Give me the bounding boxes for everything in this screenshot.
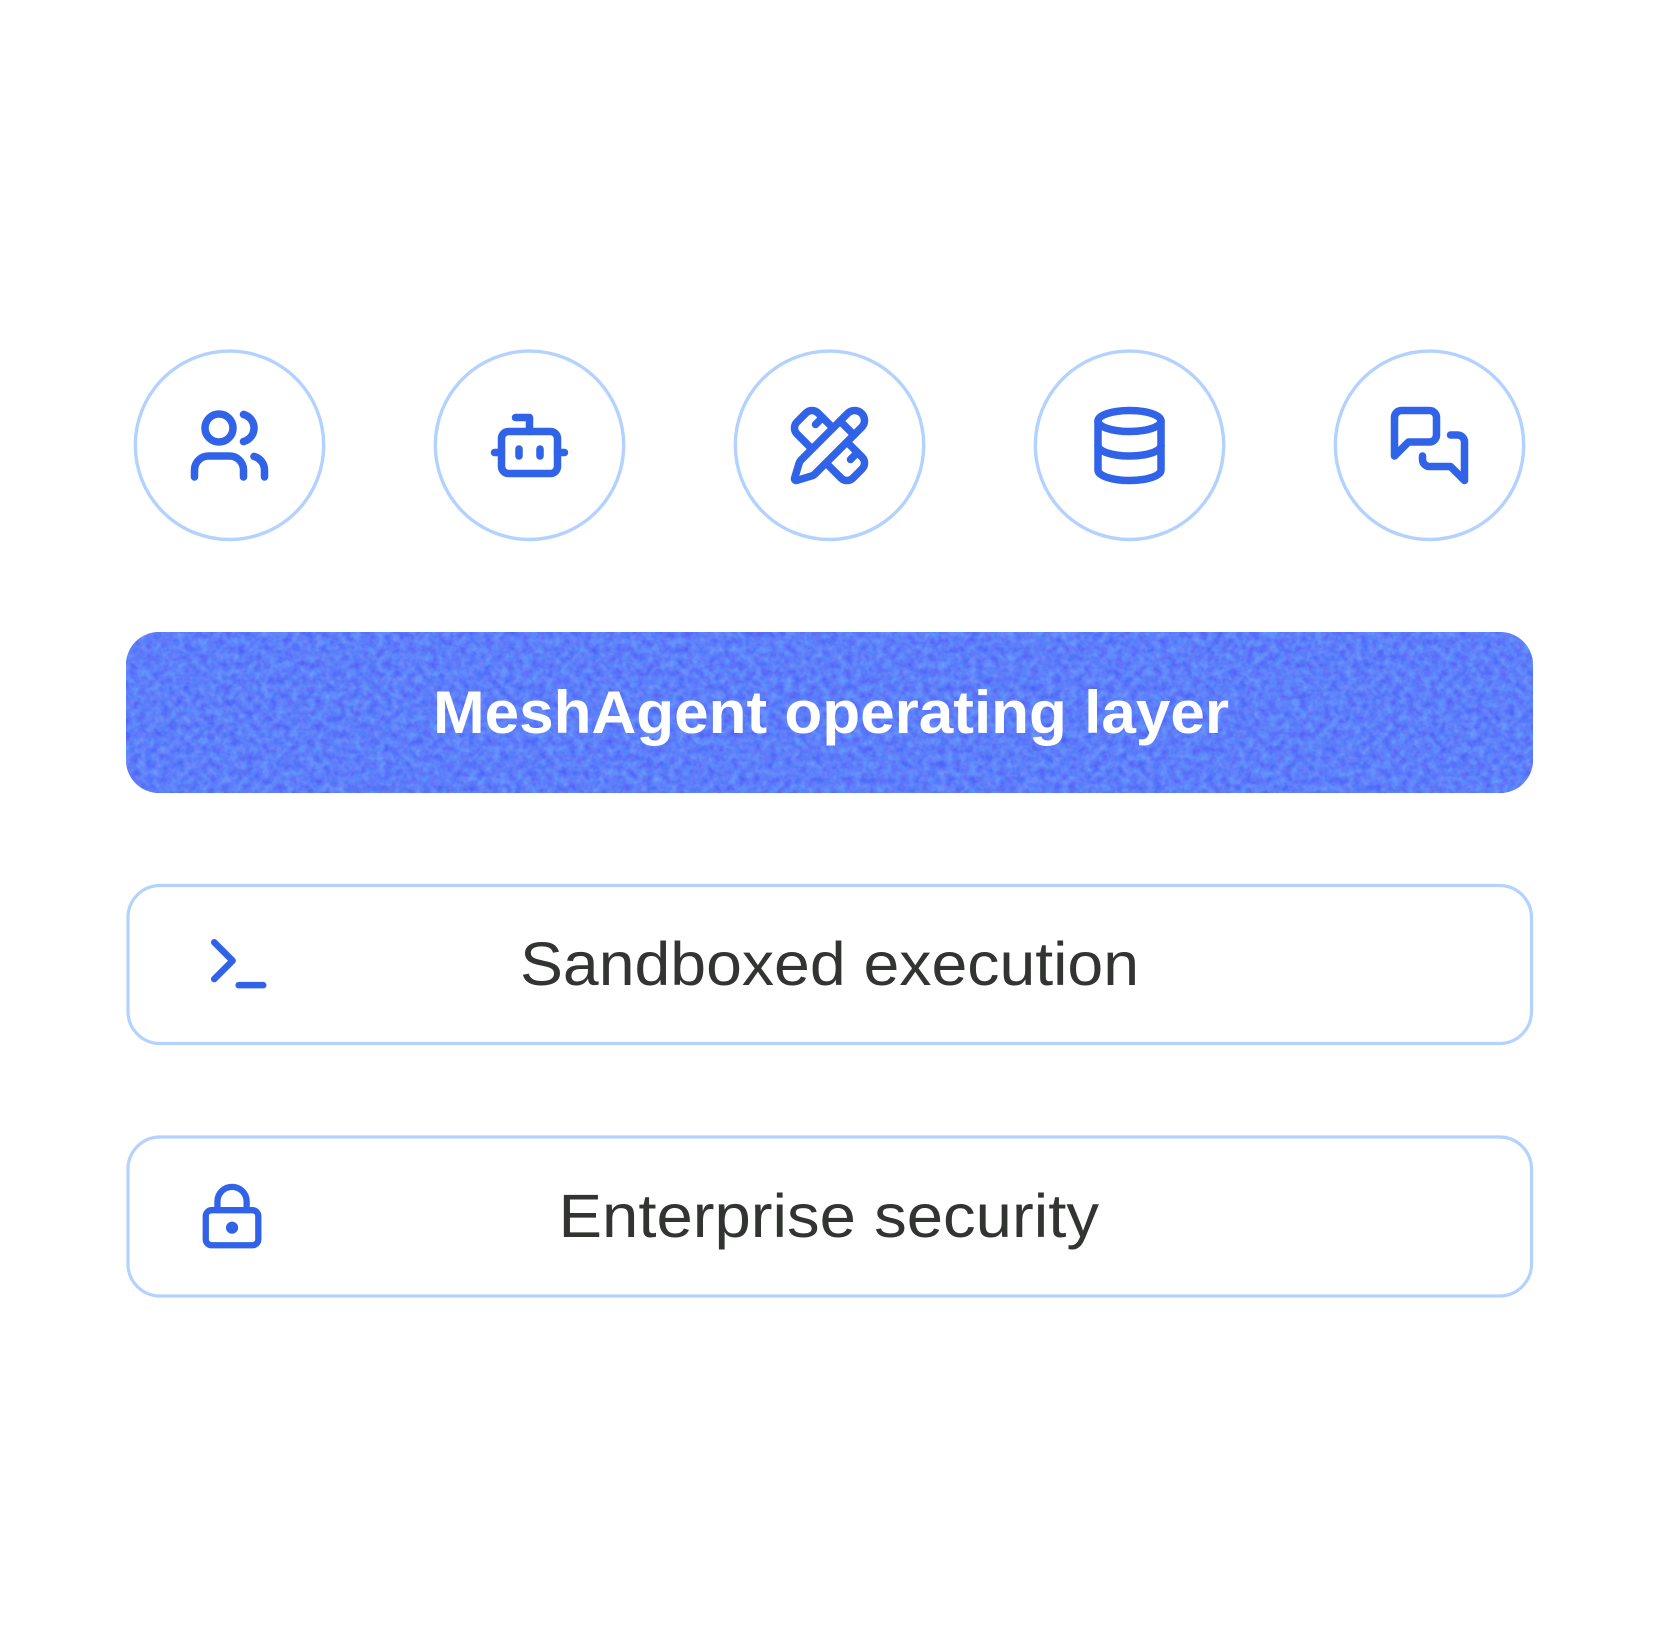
icon: users [135, 351, 324, 540]
icon: terminal [214, 942, 263, 985]
icon: pencil and ruler [735, 351, 924, 540]
icon: lock [206, 1187, 258, 1245]
text: Enterprise security: Enterprise security [558, 1182, 1100, 1250]
icon circles row [135, 351, 1524, 540]
panel: sandboxed execution [128, 886, 1532, 1044]
text: Sandboxed execution: Sandboxed execution [520, 930, 1139, 998]
heading: MeshAgent operating layer: MeshAgent operating layer [433, 679, 1229, 746]
icon: bot [435, 351, 624, 540]
icon: chat messages [1335, 351, 1524, 540]
panel: MeshAgent operating layer [126, 632, 1533, 793]
icon: database [1035, 351, 1224, 540]
panel: enterprise security [128, 1137, 1532, 1296]
